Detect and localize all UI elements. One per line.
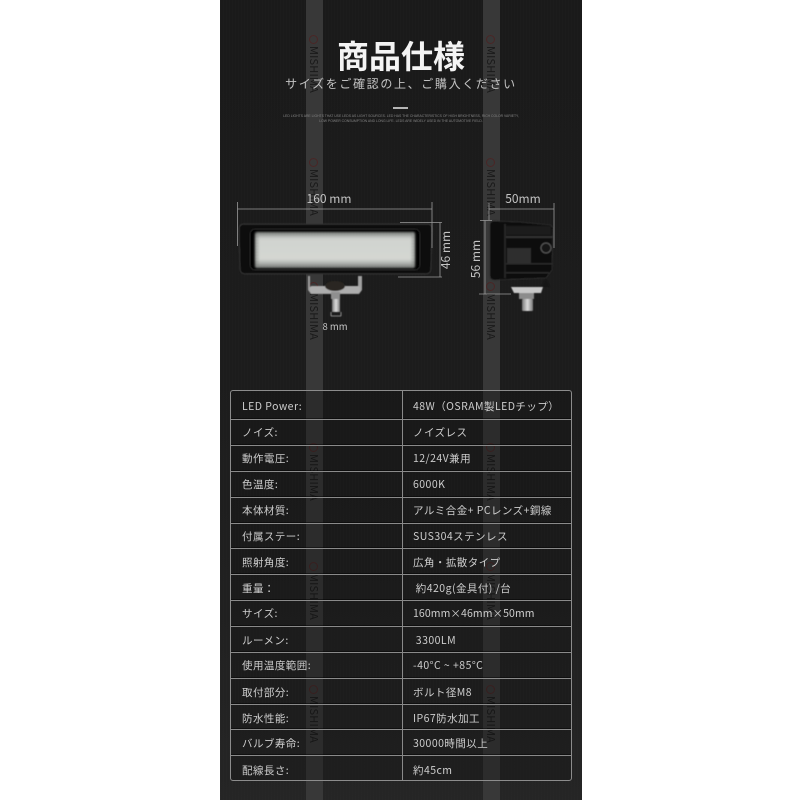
row: noise [242, 425, 467, 440]
watermark stripe: right: MISHIMA [483, 293, 499, 340]
row: colour temperature [242, 477, 445, 492]
arrow: 160 mm dimension line [238, 202, 432, 248]
watermark stripe: left: MISHIMA [306, 46, 322, 93]
row: lumens: ルーメン: [242, 633, 289, 648]
row: operating temperature [242, 658, 483, 673]
row: LED power [242, 399, 559, 414]
row: size: 160mm×46mm×50mm [413, 606, 535, 621]
row: size [242, 606, 535, 621]
watermark stripe: left: MISHIMA [306, 454, 322, 501]
row: wire length: 配線長さ: [242, 763, 289, 778]
row: LED power: 48W（OSRAM製LEDチップ） [413, 399, 559, 414]
row: beam angle: 照射角度: [242, 555, 289, 570]
row: voltage [242, 451, 471, 466]
row: included stay: SUS304ステンレス [413, 529, 508, 544]
panel: dark product specification background [220, 0, 582, 800]
row: LED power: LED Power: [242, 399, 302, 414]
row: noise: ノイズレス [413, 425, 467, 440]
row: voltage: 12/24V兼用 [413, 451, 471, 466]
row: waterproof: 防水性能: [242, 711, 289, 726]
row: wire length: 約45cm [413, 763, 452, 778]
icon: front view of lamp [239, 224, 432, 274]
fine print: LOW POWER CONSUMPTION AND LONG LIFE. LEDS ARE WIDELY USED IN THE AUTOMOTIVE FIELD. [319, 118, 483, 122]
table: product specifications [230, 390, 572, 781]
divider dash [393, 107, 408, 109]
watermark stripe: right: MISHIMA [483, 46, 499, 93]
arrow: 50 mm dimension line [489, 203, 554, 248]
watermark stripe: right: MISHIMA [483, 454, 499, 501]
watermark stripe: left: MISHIMA [306, 573, 322, 620]
row: beam angle [242, 555, 501, 570]
row: voltage: 動作電圧: [242, 451, 289, 466]
row: included stay [242, 529, 508, 544]
row: mounting: ボルト径M8 [413, 685, 472, 700]
row: body material: 本体材質: [242, 503, 289, 518]
row: wire length [242, 763, 452, 778]
row: colour temperature: 6000K [413, 477, 445, 492]
row: included stay: 付属ステー: [242, 529, 300, 544]
icon: front bracket and bolt [308, 276, 362, 316]
watermark stripe: right: MISHIMA [483, 696, 499, 743]
row: weight: 重量： [242, 581, 275, 596]
row: waterproof: IP67防水加工 [413, 711, 480, 726]
row: body material [242, 503, 552, 518]
watermark stripe: right: MISHIMA [483, 573, 499, 620]
row: operating temperature: -40°C ~ +85°C [413, 658, 483, 673]
icon: side bracket and bolt [511, 287, 543, 311]
watermark stripe: left [306, 0, 323, 800]
row: size: サイズ: [242, 606, 278, 621]
row: operating temperature: 使用温度範囲: [242, 658, 311, 673]
label: 50 mm: 50mm [505, 190, 541, 207]
title: 商品仕様 [337, 32, 465, 78]
row: colour temperature: 色温度: [242, 477, 278, 492]
row: bulb life: バルブ寿命: [242, 736, 300, 751]
watermark stripe: left: MISHIMA [306, 696, 322, 743]
label: 56 mm: 56 mm [467, 240, 484, 278]
icon: side view of lamp [490, 221, 553, 287]
arrow: 46 mm dimension line [398, 222, 442, 277]
subtitle: サイズをご確認の上、ご購入ください [285, 75, 517, 92]
arrow: 56 mm dimension line [479, 220, 511, 294]
row: waterproof [242, 711, 480, 726]
row: mounting: 取付部分: [242, 685, 289, 700]
row: noise: ノイズ: [242, 425, 278, 440]
watermark stripe: left: MISHIMA [306, 169, 322, 216]
fine print: LED LIGHTS ARE LIGHTS THAT USE LEDS AS LIGHT SOURCES. LED HAS THE CHARACTERISTICS OF HIGH BRIGHTNESS, RICH COLOR VARIETY, [283, 114, 519, 118]
label: 46 mm: 46 mm [437, 231, 454, 269]
fine print [283, 114, 519, 122]
label: 8 mm: 8 mm [322, 319, 348, 333]
row: beam angle: 広角・拡散タイプ [413, 555, 501, 570]
row: bulb life [242, 736, 488, 751]
row: mounting [242, 685, 472, 700]
row: lumens: 3300LM [416, 633, 456, 648]
watermark stripe: right [483, 0, 500, 800]
label: 160 mm: 160 mm [307, 190, 351, 207]
row: weight: 約420g(金具付) /台 [416, 581, 511, 596]
watermark stripe: right: MISHIMA [483, 169, 499, 216]
row: weight [242, 581, 511, 596]
watermark stripe: left: MISHIMA [306, 293, 322, 340]
row: lumens [242, 633, 456, 648]
diagram: lamp dimensions [237, 190, 554, 333]
row: bulb life: 30000時間以上 [413, 736, 488, 751]
row: body material: アルミ合金+ PCレンズ+銅線 [413, 503, 552, 518]
